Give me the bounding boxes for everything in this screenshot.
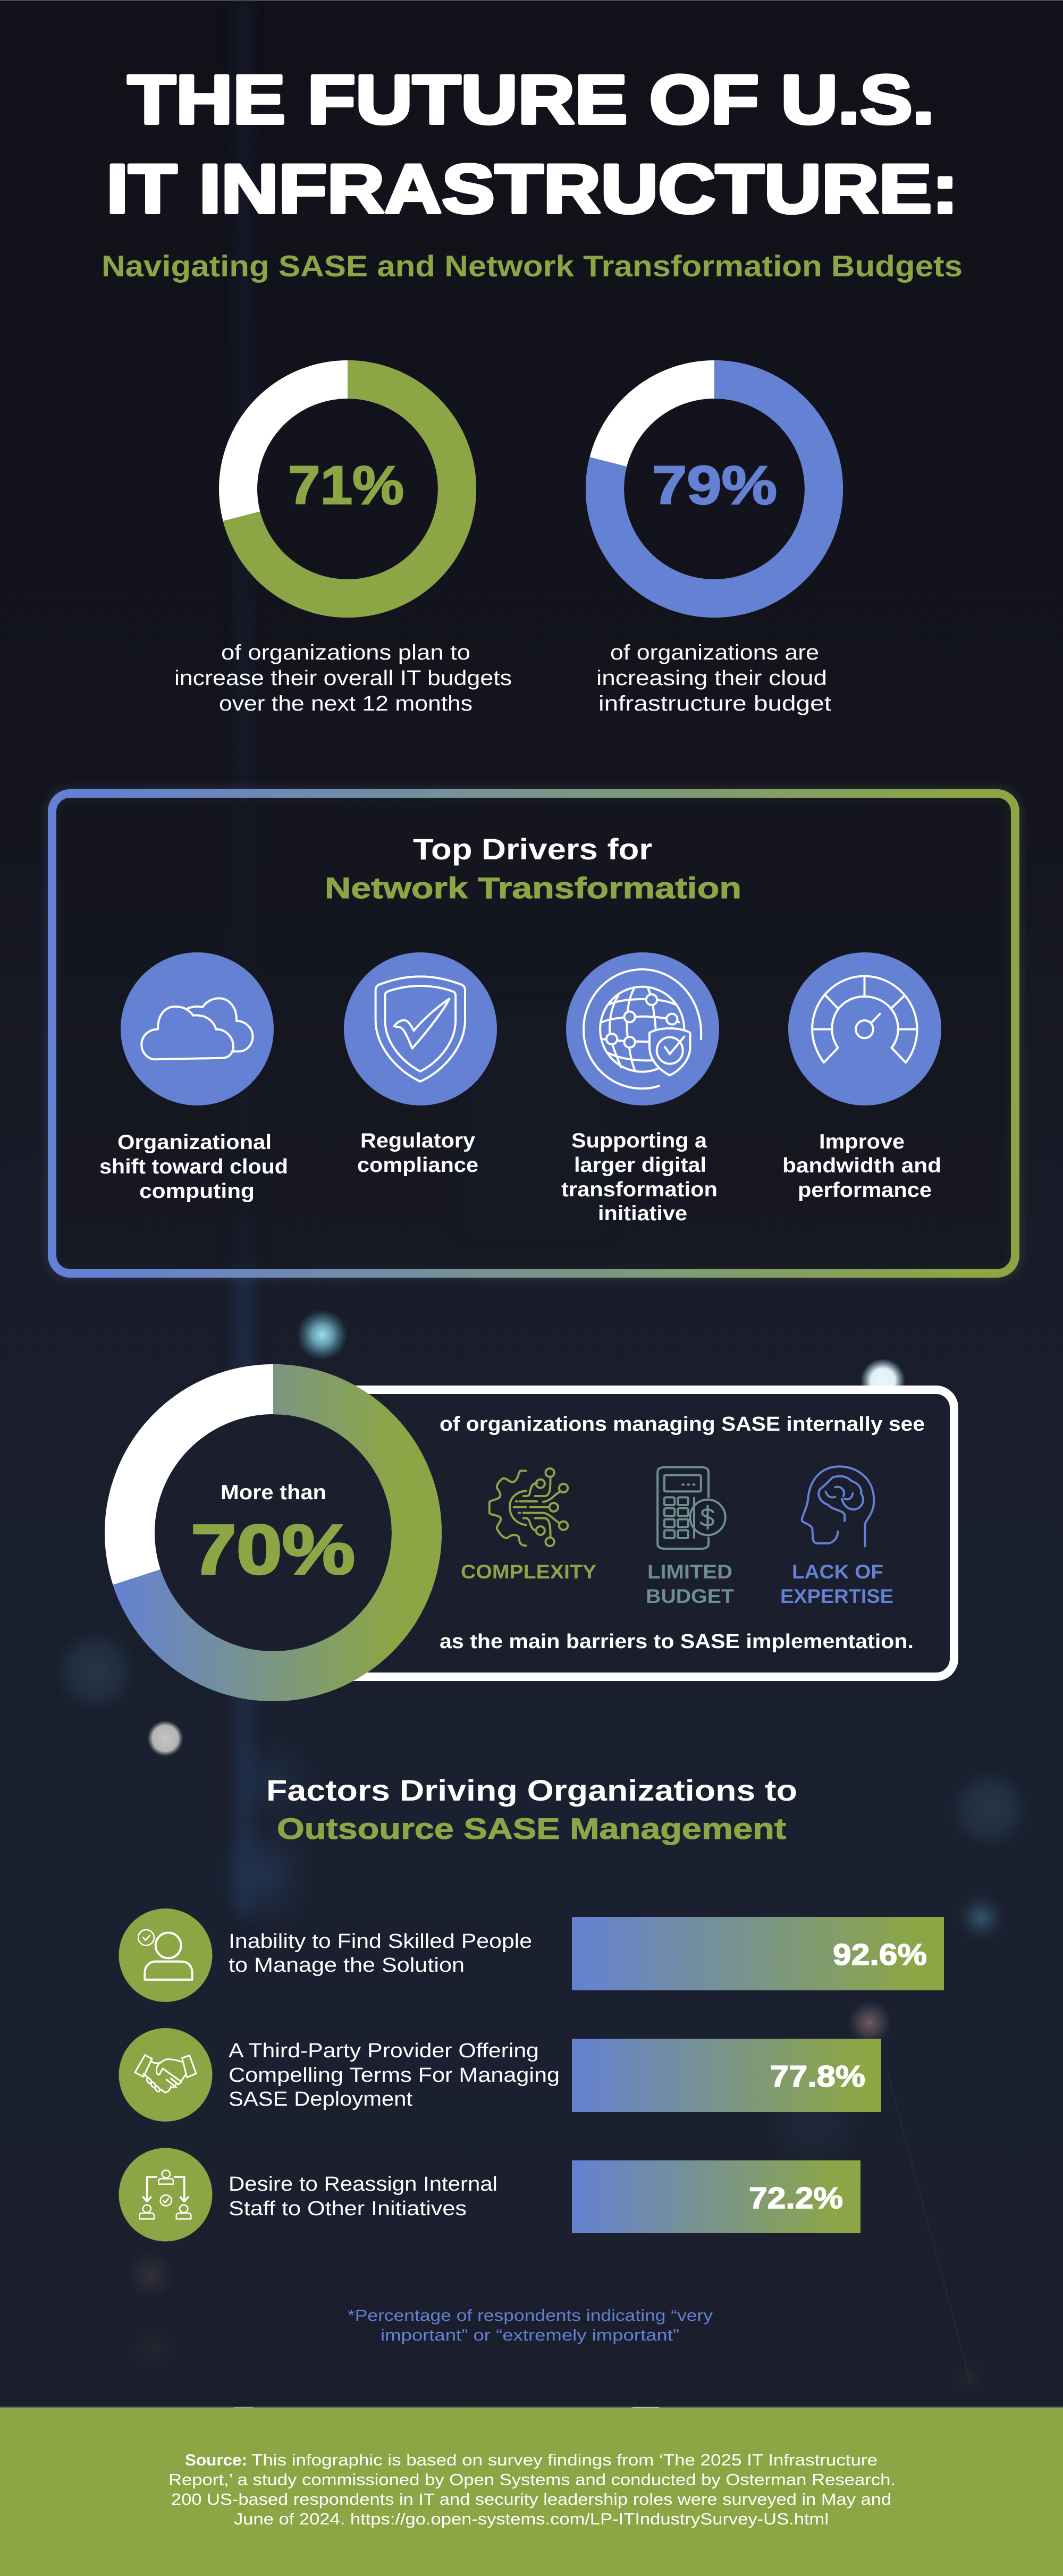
text: internally see: of organizations managing SASE internally see (440, 1413, 925, 1435)
icon: globe with shield (566, 952, 719, 1105)
footer: source: Source: (185, 2451, 247, 2469)
caption: IT budgets (174, 641, 512, 715)
footnote: important” or “extremely important” (381, 2326, 679, 2344)
heading: top drivers: Top Drivers for (413, 832, 652, 866)
icon: head with brain (802, 1466, 874, 1546)
stat: 70 percent donut: More than (221, 1481, 326, 1504)
driver label: bandwidth: performance (798, 1179, 932, 1202)
heading: outsource factors: Outsource SASE Management (277, 1812, 786, 1845)
driver label: cloud (99, 1131, 288, 1203)
stat: 79 percent donut (605, 379, 824, 598)
icon: calculator with coin (657, 1467, 725, 1549)
icon: staff reassignment (119, 2148, 213, 2242)
icon: person with check (119, 1908, 213, 2002)
icon: shield (344, 952, 497, 1105)
factor row 1: Inability to Find Skilled People (229, 1930, 532, 1953)
stat: 71 percent donut: 71% (288, 455, 404, 516)
stat: 71 percent donut (238, 379, 457, 598)
driver label: digital transformation (561, 1129, 718, 1225)
icon: speed gauge (788, 952, 941, 1105)
driver label: digital transformation: initiative (598, 1202, 687, 1225)
factor row 1 (119, 1908, 944, 2002)
footnote: *Percentage of respondents indicating “very (348, 2306, 713, 2325)
driver label: cloud: computing (139, 1180, 255, 1203)
caption: cloud budgets: of organizations are (610, 641, 819, 664)
heading: top drivers (325, 832, 741, 905)
footnote (348, 2306, 713, 2344)
driver label: bandwidth: Improve (819, 1130, 905, 1153)
driver label: cloud: Organizational (117, 1131, 272, 1154)
factor row 2 (119, 2028, 881, 2122)
label: lack of expertise (780, 1561, 893, 1607)
bar 77.8 percent: 77.8% (770, 2059, 865, 2093)
caption: cloud budgets: increasing their cloud (596, 666, 827, 690)
label: limited budget: LIMITED (647, 1561, 732, 1583)
footer: source: This infographic is based on survey findings from ‘The 2025 IT Infrastructure (251, 2451, 878, 2469)
heading: outsource factors (266, 1773, 797, 1845)
label: limited budget (646, 1561, 734, 1607)
heading: outsource factors: Factors Driving Organizations to (266, 1773, 797, 1807)
caption: IT budgets: of organizations plan to (221, 641, 470, 664)
bar 92.6 percent: 92.6% (833, 1938, 927, 1972)
factor row 1: to Manage the Solution (229, 1954, 465, 1977)
factor row 2: A Third-Party Provider Offering (229, 2040, 539, 2062)
caption: cloud budgets: infrastructure budget (598, 692, 831, 715)
icon: handshake (119, 2028, 213, 2122)
factor row 3: Staff to Other Initiatives (229, 2198, 467, 2220)
subtitle: Navigating SASE and Network Transformation Budgets (102, 249, 963, 283)
driver label: digital transformation: Supporting a (571, 1129, 707, 1152)
footer: source: 200 US-based respondents in IT and security leadership roles were surveyed in May and (171, 2490, 891, 2509)
driver label: regulatory: compliance (357, 1154, 478, 1177)
driver label: cloud: shift toward cloud (99, 1155, 288, 1178)
factor row 3: Desire to Reassign Internal (229, 2173, 497, 2195)
driver label: regulatory: Regulatory (360, 1129, 475, 1152)
label: complexity: COMPLEXITY (461, 1561, 596, 1583)
caption: IT budgets: increase their overall IT budgets (174, 666, 512, 690)
heading: top drivers: Network Transformation (325, 871, 741, 905)
caption: cloud budgets (596, 641, 831, 715)
bar 72.2 percent: 72.2% (749, 2181, 843, 2215)
panel: top drivers (52, 793, 1015, 1273)
label: lack of expertise: LACK OF (792, 1561, 883, 1583)
factor row 3 (119, 2148, 860, 2242)
bar 72.2 percent (572, 2160, 860, 2233)
footer: source (0, 2406, 1063, 2576)
bar 92.6 percent (572, 1917, 944, 1990)
title: IT INFRASTRUCTURE: (106, 150, 958, 227)
bar 77.8 percent (572, 2039, 881, 2112)
driver label: bandwidth: bandwidth and (782, 1154, 941, 1177)
stat: 70 percent donut (130, 1389, 417, 1676)
text: main barriers: as the main barriers to SASE implementation. (440, 1631, 914, 1653)
label: limited budget: BUDGET (646, 1585, 734, 1607)
driver label: digital transformation: larger digital (574, 1154, 706, 1177)
driver label: bandwidth (782, 1130, 941, 1202)
footer: source: Report,’ a study commissioned by Open Systems and conducted by Osterman Research. (168, 2470, 896, 2489)
stat: 79 percent donut: 79% (652, 455, 777, 516)
stat: 70 percent donut: 70% (191, 1510, 355, 1589)
driver label: digital transformation: transformation (561, 1178, 718, 1201)
driver label: regulatory (357, 1129, 478, 1177)
icon: clouds (121, 952, 274, 1105)
title (106, 61, 958, 227)
footer: source: June of 2024. https://go.open-systems.com/LP-ITIndustrySurvey-US.html (234, 2510, 829, 2528)
factor row 2: Compelling Terms For Managing (229, 2064, 560, 2087)
title: THE FUTURE OF U.S. (128, 61, 934, 138)
factor row 2: SASE Deployment (229, 2088, 412, 2110)
panel: SASE barriers (130, 1389, 954, 1677)
caption: IT budgets: over the next 12 months (219, 692, 473, 715)
icon: circuit gear (490, 1468, 568, 1546)
label: lack of expertise: EXPERTISE (780, 1585, 893, 1607)
